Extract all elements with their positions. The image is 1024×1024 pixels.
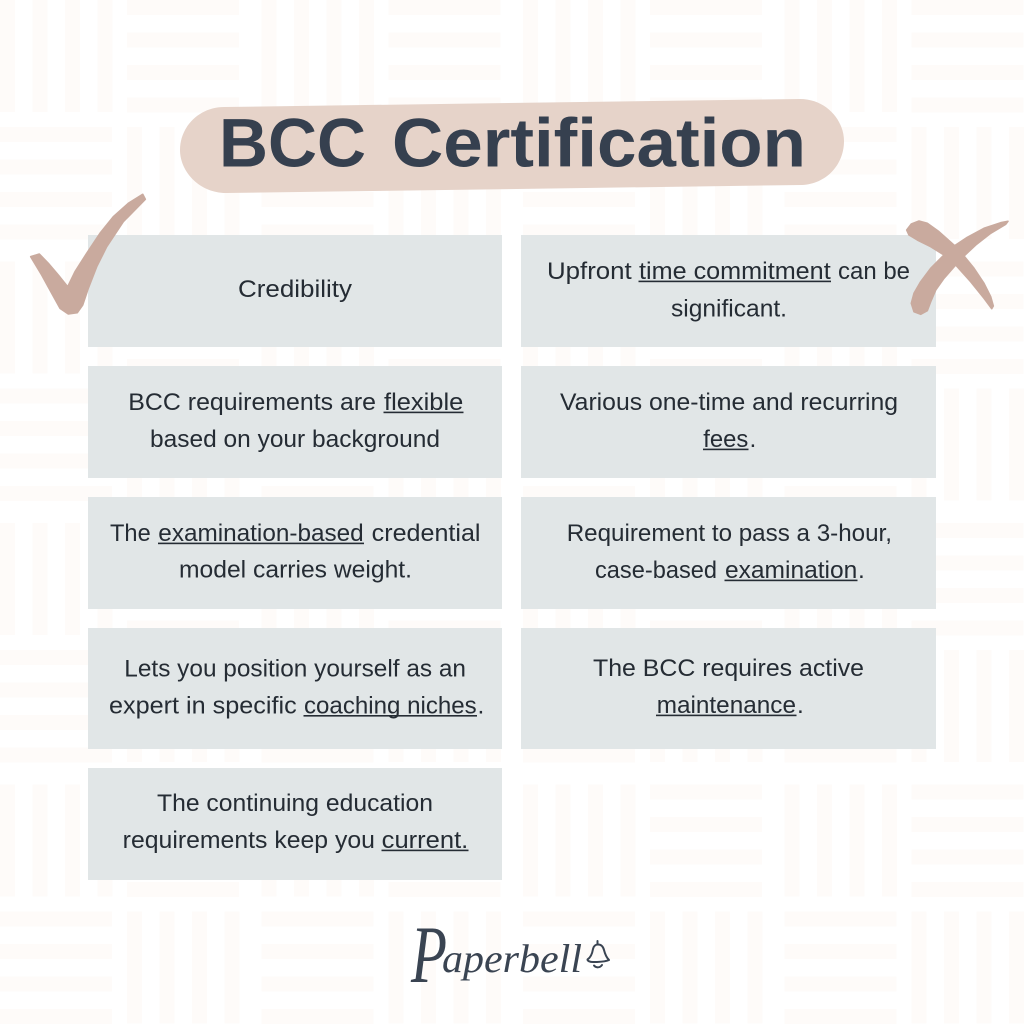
panel: continuing education xyxy=(88,768,502,880)
text: examination requirement: case-based xyxy=(595,557,717,584)
text: flexible requirements xyxy=(128,389,464,453)
text: examination-based credential: credential xyxy=(372,520,480,547)
logo wordmark: P xyxy=(410,909,447,1000)
icon: bell xyxy=(588,941,609,967)
text: fees xyxy=(560,389,898,453)
text: examination requirement: . xyxy=(858,557,865,584)
text: fees: Various one-time and recurring xyxy=(560,389,898,416)
text: Credibility: Credibility xyxy=(238,276,353,303)
title banner xyxy=(180,99,844,193)
text: continuing education xyxy=(123,790,468,854)
text: continuing education: The continuing education xyxy=(157,790,433,817)
text: coaching niches: coaching niches xyxy=(304,692,477,720)
panel: flexible requirements xyxy=(88,366,502,478)
title: BCC xyxy=(219,104,366,182)
icon: check mark xyxy=(31,194,145,314)
text: active maintenance: maintenance xyxy=(657,692,796,719)
text: coaching niches: expert in specific xyxy=(109,692,297,720)
panel: fees xyxy=(521,366,936,478)
text: active maintenance xyxy=(593,655,864,719)
panel: examination-based credential xyxy=(88,497,502,609)
panel: coaching niches xyxy=(88,628,502,749)
text: continuing education: requirements keep you xyxy=(123,827,375,854)
text: active maintenance: The BCC requires active xyxy=(593,655,864,682)
text: examination-based credential: model carries weight. xyxy=(179,556,412,584)
logo: Paperbell xyxy=(410,909,609,1000)
panel: time commitment xyxy=(521,235,936,347)
title xyxy=(219,104,806,182)
text: examination requirement: examination xyxy=(725,557,857,584)
panel: examination requirement xyxy=(521,497,936,609)
text: examination requirement xyxy=(567,520,892,584)
text: time commitment: significant. xyxy=(671,296,787,322)
text: fees: fees xyxy=(703,426,748,453)
panel: Credibility xyxy=(88,235,502,347)
text: time commitment xyxy=(547,258,910,322)
icon: cross mark xyxy=(907,221,1008,314)
text: examination-based credential: The xyxy=(110,520,151,547)
logo wordmark: aperbell xyxy=(442,936,582,981)
logo wordmark xyxy=(410,909,582,1000)
text: time commitment: can be xyxy=(838,258,910,285)
text: coaching niches xyxy=(109,656,484,720)
text: examination requirement: Requirement to pass a 3-hour, xyxy=(567,520,892,547)
panel: active maintenance xyxy=(521,628,936,749)
text: flexible requirements: flexible xyxy=(384,389,463,416)
text: examination-based credential: examination-based xyxy=(158,520,364,547)
text: flexible requirements: based on your background xyxy=(150,426,440,453)
text: examination-based credential xyxy=(110,520,480,584)
text: continuing education: current. xyxy=(382,827,468,854)
text: coaching niches: . xyxy=(478,692,484,720)
title: Certification xyxy=(392,104,806,182)
text: time commitment: Upfront xyxy=(547,258,632,285)
text: fees: . xyxy=(750,426,756,453)
text: time commitment: time commitment xyxy=(639,258,831,285)
text: flexible requirements: BCC requirements are xyxy=(128,389,376,416)
text: active maintenance: . xyxy=(797,692,804,719)
text: coaching niches: Lets you position yourself as an xyxy=(124,656,466,683)
